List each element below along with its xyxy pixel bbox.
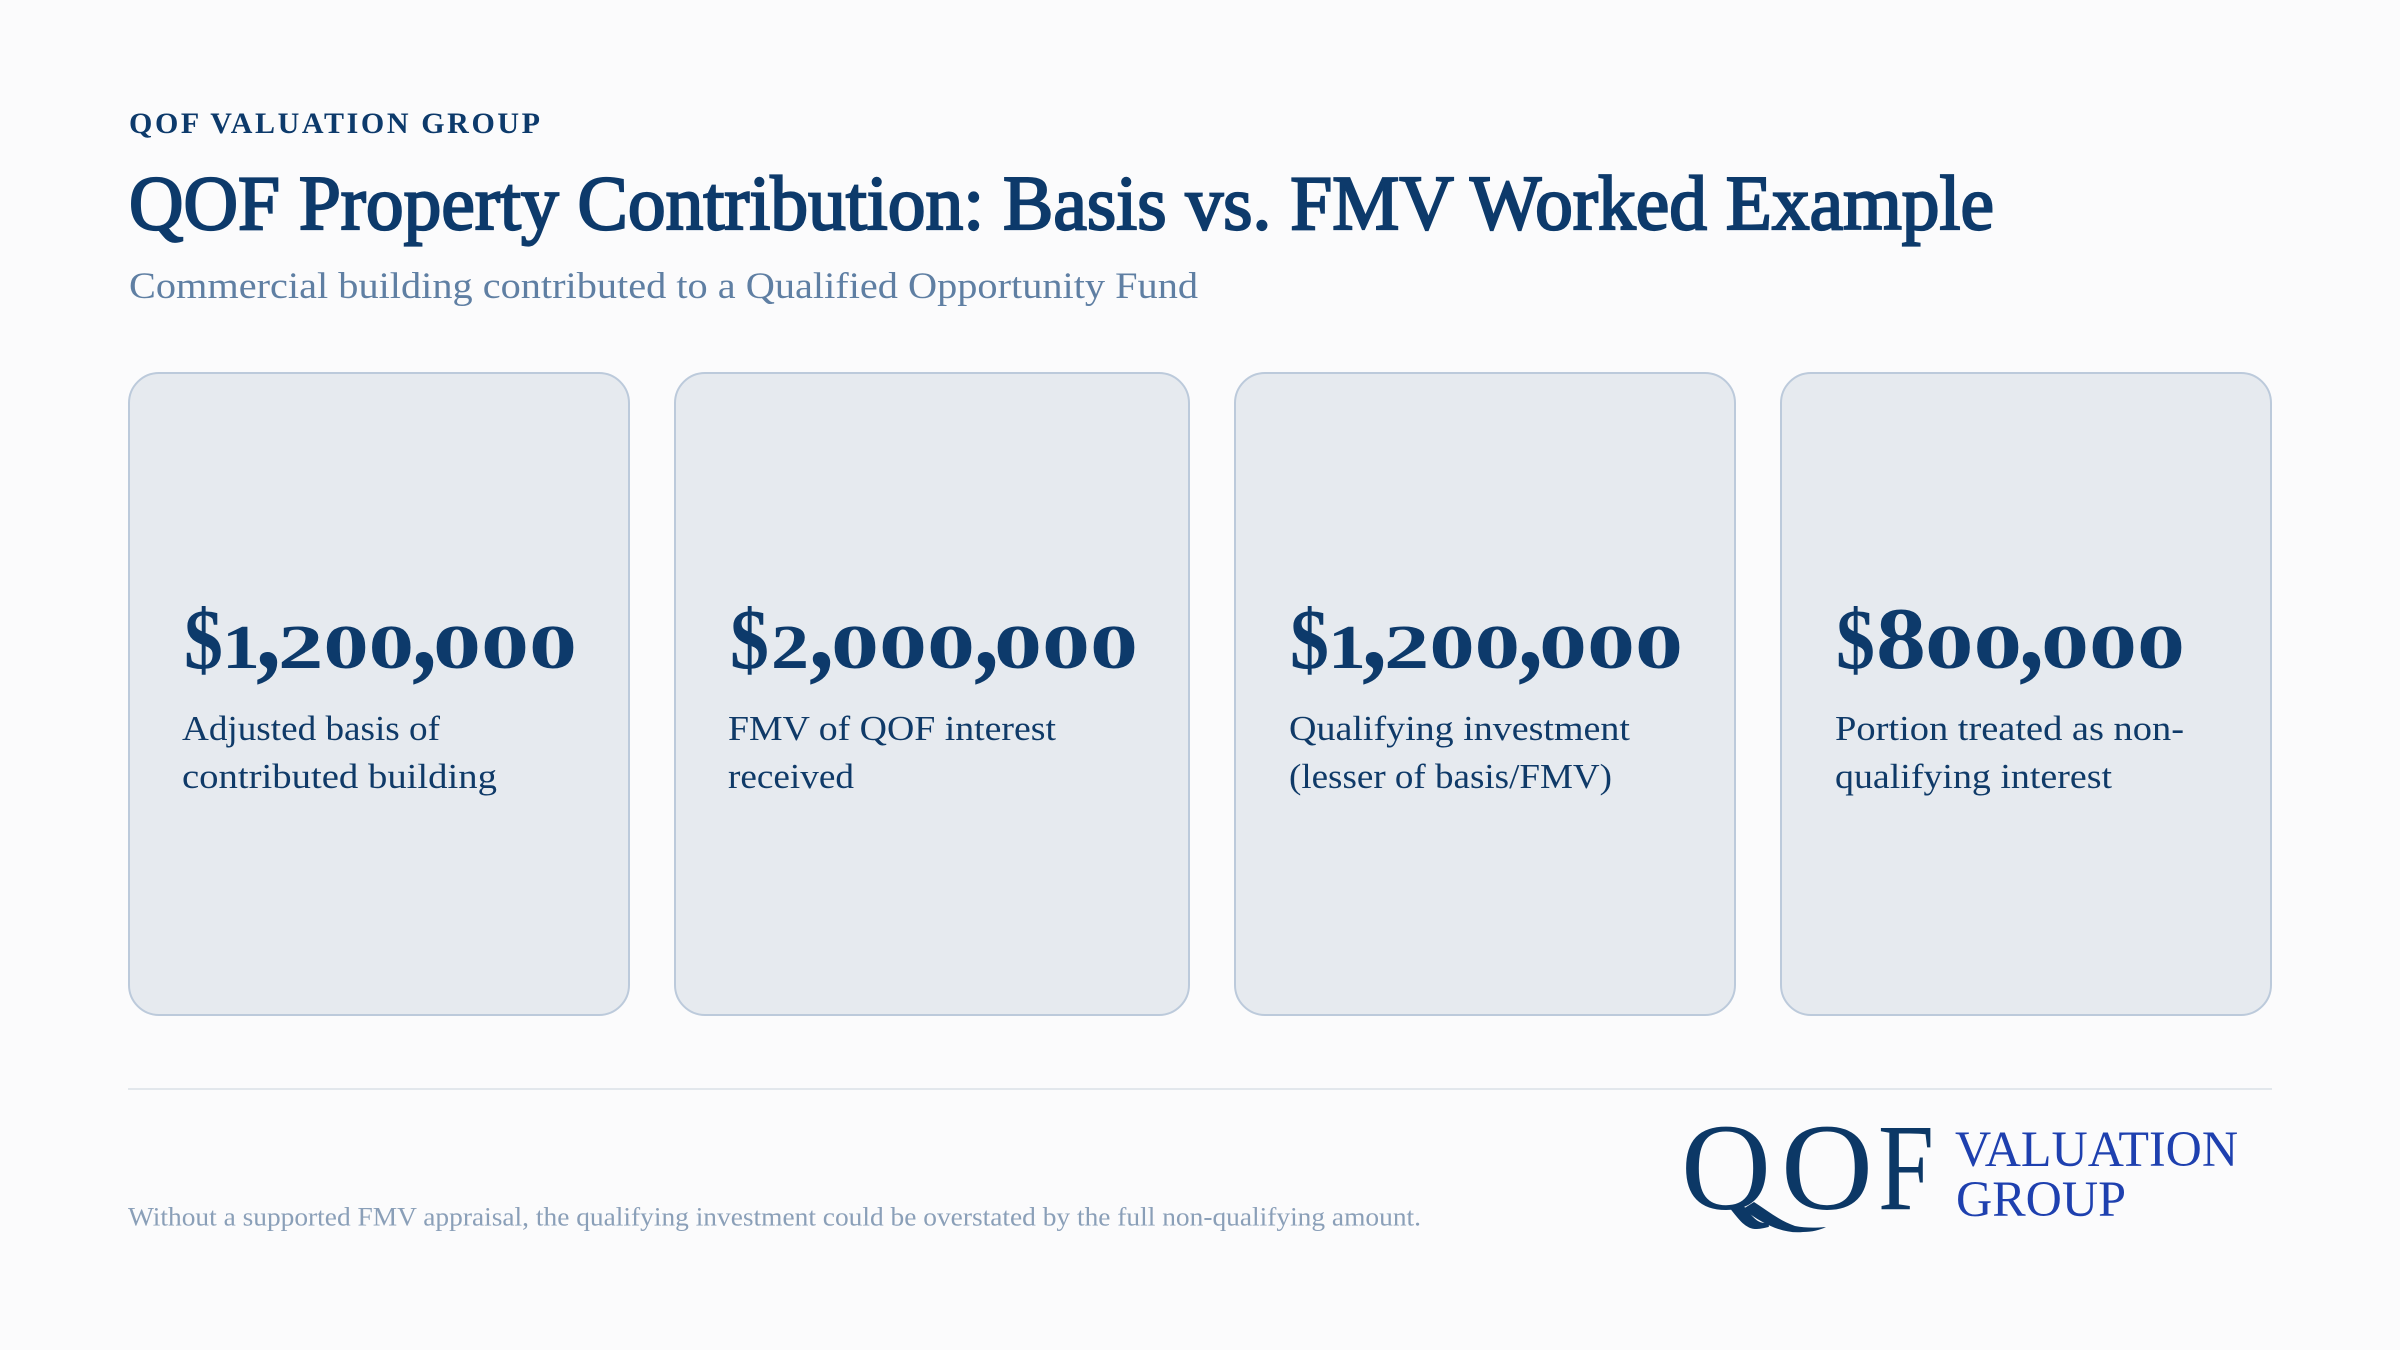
value: $800,000: 000: [2041, 614, 2185, 682]
value: $1,200,000: 000: [1539, 614, 1683, 682]
logo mark: QOF: Q: [1681, 1099, 1771, 1236]
panel: non-qualifying portion: [1781, 373, 2271, 1015]
value: $1,200,000: $: [184, 591, 223, 687]
value: $800,000: ,: [2019, 573, 2044, 692]
value: $1,200,000: ,: [256, 573, 281, 692]
value: $1,200,000: 200: [278, 614, 414, 682]
logo wordmark: GROUP: [1956, 1172, 2126, 1228]
value: $2,000,000: ,: [974, 573, 999, 692]
logo mark: QOF: O: [1781, 1099, 1873, 1236]
footnote: Without a supported FMV appraisal, the qualifying investment could be overstated by the full non-qualifying amount.: [128, 1202, 1421, 1232]
title: QOF Property Contribution: Basis vs. FMV Worked Example: [129, 160, 1994, 246]
label: non-qualifying portion: Portion treated as non-: [1835, 709, 2184, 748]
label: non-qualifying portion: qualifying interest: [1835, 757, 2112, 796]
value: $1,200,000: $: [1290, 591, 1329, 687]
value: $2,000,000: 000: [831, 614, 975, 682]
value: $800,000: $: [1836, 591, 1875, 687]
value: $800,000: 8: [1876, 591, 1926, 688]
value: $1,200,000: 1: [222, 614, 260, 682]
label: FMV received: FMV of QOF interest: [728, 709, 1056, 748]
label: FMV received: received: [728, 757, 855, 796]
value: $800,000: 00: [1925, 614, 2022, 682]
logo tail of Q: [1743, 1202, 1826, 1232]
value: $1,200,000: ,: [412, 573, 437, 692]
logo: QOF Valuation Group: [1681, 1099, 2238, 1236]
subtitle: Commercial building contributed to a Qualified Opportunity Fund: [129, 266, 1199, 307]
label: adjusted basis: Adjusted basis of: [182, 709, 440, 748]
value: $1,200,000: ,: [1362, 573, 1387, 692]
label: qualifying investment: (lesser of basis/FMV): [1289, 757, 1612, 796]
panel: FMV received: [675, 373, 1189, 1015]
label: adjusted basis: contributed building: [182, 757, 497, 796]
value: $1,200,000: 1: [1328, 614, 1366, 682]
eyebrow: company name: QOF VALUATION GROUP: [129, 107, 540, 140]
panel: qualifying investment: [1235, 373, 1735, 1015]
value: $2,000,000: 2: [771, 614, 809, 682]
value: $1,200,000: 000: [433, 614, 577, 682]
label: qualifying investment: Qualifying investment: [1289, 709, 1630, 748]
value: $2,000,000: 000: [994, 614, 1138, 682]
value: $2,000,000: ,: [809, 573, 834, 692]
panel: adjusted basis: [129, 373, 629, 1015]
logo wordmark: VALUATION: [1955, 1122, 2238, 1178]
value: $1,200,000: ,: [1518, 573, 1543, 692]
value: $2,000,000: $: [730, 591, 769, 687]
logo mark: QOF: F: [1878, 1099, 1934, 1236]
value: $1,200,000: 200: [1384, 614, 1520, 682]
